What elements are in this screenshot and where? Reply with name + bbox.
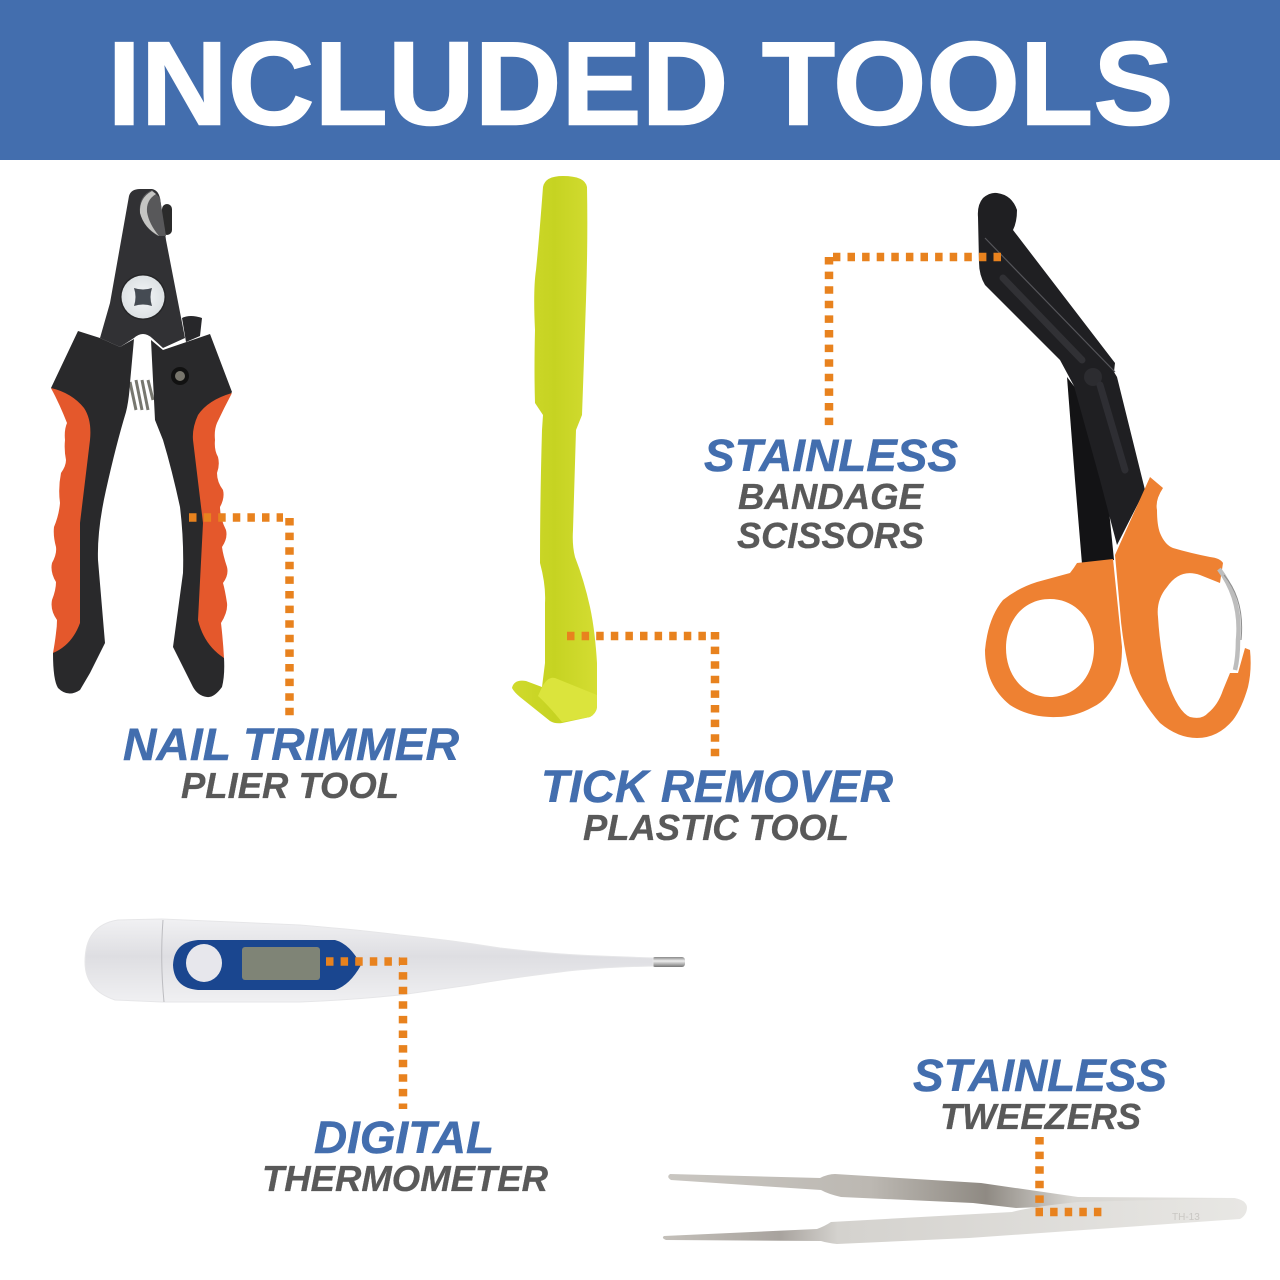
nail trimmer left grip (51, 388, 90, 653)
callout line: tweezers (1036, 1137, 1103, 1212)
label: stainless tweezers: TWEEZERS (940, 1096, 1141, 1137)
thermometer button (186, 944, 222, 982)
label: bandage scissors (704, 430, 958, 556)
callout line: nail trimmer (189, 518, 290, 716)
scissors right handle (1115, 477, 1251, 738)
tool: nail trimmer pliers (51, 189, 232, 697)
label: bandage scissors: STAINLESS (704, 430, 958, 481)
label: bandage scissors: SCISSORS (737, 515, 924, 556)
label: stainless tweezers (913, 1050, 1167, 1137)
scissors upper blade (978, 193, 1145, 545)
nail trimmer right handle (151, 334, 232, 697)
tool: digital thermometer (85, 919, 685, 1002)
nail trimmer left handle (51, 331, 134, 694)
label: nail trimmer: NAIL TRIMMER (123, 719, 459, 770)
thermometer cap seam (162, 920, 164, 1002)
thermometer tip (652, 957, 685, 967)
nail trimmer pin (171, 367, 189, 385)
thermometer body (85, 919, 653, 1002)
nail trimmer blade (140, 190, 166, 236)
label: digital thermometer: DIGITAL (314, 1112, 494, 1163)
nail trimmer right grip (193, 393, 232, 658)
label: tick remover: TICK REMOVER (541, 761, 893, 812)
tweezers upper arm (668, 1174, 1246, 1208)
label: nail trimmer (123, 719, 459, 806)
scissors blade edge line (985, 238, 1115, 372)
label: stainless tweezers: STAINLESS (913, 1050, 1167, 1101)
callout line: scissors (829, 257, 1001, 429)
scissors left handle (985, 559, 1122, 717)
label: digital thermometer: THERMOMETER (262, 1158, 548, 1199)
thermometer blue panel (173, 940, 361, 990)
callout line: tick remover (567, 632, 715, 759)
scissors lower blade (1067, 377, 1114, 564)
label: digital thermometer (262, 1112, 548, 1199)
label: tick remover: PLASTIC TOOL (583, 807, 849, 848)
tool: bandage scissors (978, 193, 1251, 738)
tick remover hook fold (538, 678, 597, 722)
tool: yellow tick remover (512, 176, 597, 723)
scissors pivot (1084, 368, 1102, 386)
callout line: thermometer (326, 958, 403, 1109)
label: nail trimmer: PLIER TOOL (181, 765, 399, 806)
scissors carabiner (1219, 569, 1239, 670)
tool: stainless tweezers (663, 1174, 1247, 1244)
label: bandage scissors: BANDAGE (738, 476, 924, 517)
thermometer LCD screen (242, 947, 320, 980)
title banner: INCLUDED TOOLS (108, 18, 1174, 150)
nail trimmer spring (130, 380, 153, 410)
title banner (0, 0, 1280, 160)
tweezers lower arm (663, 1198, 1247, 1244)
nail trimmer roller (162, 204, 172, 235)
nail trimmer head (100, 189, 185, 348)
tweezers engraved model text: TH-13 (1172, 1212, 1200, 1223)
label: tick remover (541, 761, 893, 848)
scissors blade groove (1003, 278, 1082, 360)
nail trimmer screw (120, 274, 166, 320)
nail trimmer tab (182, 316, 202, 342)
